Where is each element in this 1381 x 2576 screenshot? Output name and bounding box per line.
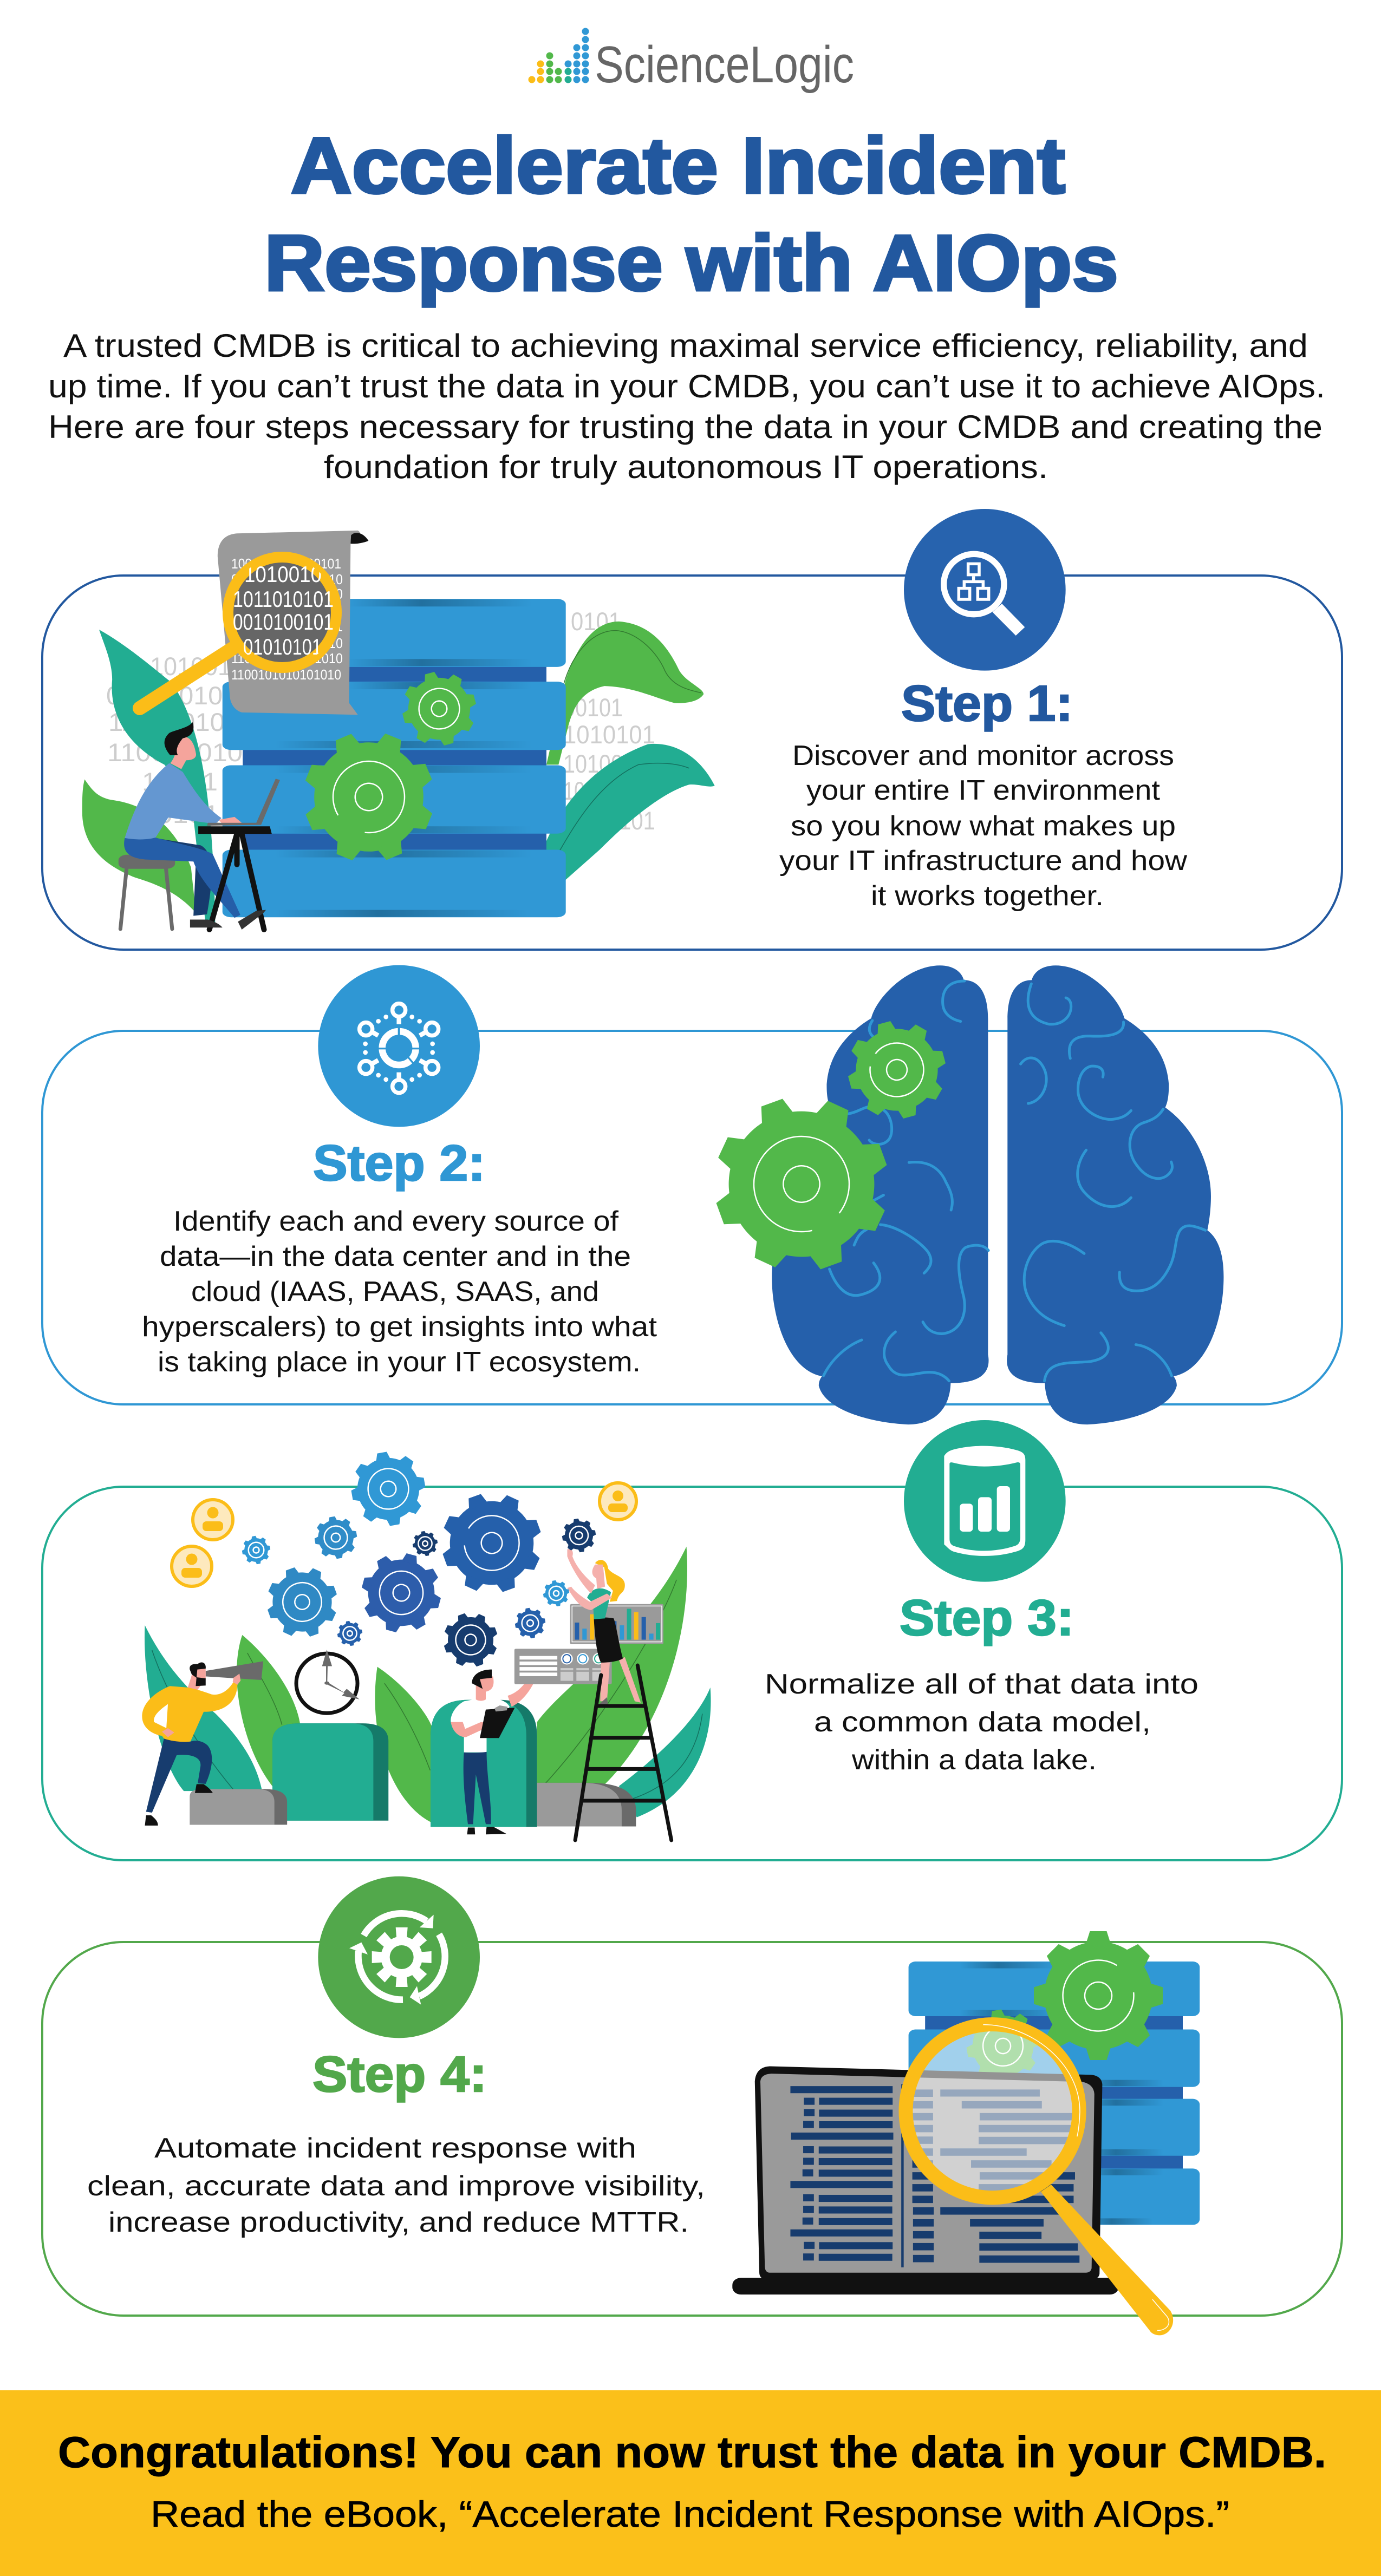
leaf: right teal: [546, 744, 715, 880]
background binary text: 101: [619, 806, 655, 835]
step 2 text: data—in the data center and in the: [160, 1241, 631, 1272]
server connectors: [925, 2015, 1183, 2170]
background binary text: 00101: [563, 693, 623, 722]
paper binary rows: [231, 555, 343, 683]
step 2 text: Identify each and every source of: [173, 1206, 619, 1237]
background binary text: 110010010: [107, 738, 243, 767]
background binary text: 01010010: [106, 681, 223, 710]
teal block: [272, 1723, 388, 1821]
title: [264, 121, 1118, 307]
step 3 heading: Step 3:: [900, 1590, 1074, 1646]
magnifier: [906, 2024, 1173, 2335]
step 2 heading: Step 2:: [313, 1135, 485, 1191]
gear: small behind lens: [961, 2004, 1045, 2088]
leaves: [145, 1547, 711, 1823]
server block 3: [223, 765, 566, 834]
stool: [119, 855, 175, 929]
laptop: [207, 779, 280, 826]
step 1 text: your IT infrastructure and how: [779, 845, 1187, 877]
step 4 text: Automate incident response with: [154, 2133, 636, 2164]
magnifier: 0010100101: [233, 609, 334, 635]
panel: step 4: [42, 1942, 1342, 2316]
illustration: step 3 team with gears: [142, 1446, 711, 1840]
laptop base: [732, 2278, 1118, 2294]
laptop screen: [760, 2074, 1095, 2273]
paper binary rows: 0010100101010101: [231, 618, 343, 635]
step 2 text: cloud (IAAS, PAAS, SAAS, and: [191, 1276, 599, 1307]
step 4 text: clean, accurate data and improve visibility,: [87, 2170, 705, 2202]
step 2 text: [142, 1206, 657, 1378]
title: Response with AIOps: [264, 219, 1118, 307]
gear: large: [691, 1073, 913, 1295]
logo: ScienceLogic: [529, 28, 854, 94]
brain left hemisphere: [772, 965, 989, 1424]
title: Accelerate Incident: [291, 121, 1065, 210]
cylinder with bars: [944, 1446, 1025, 1556]
bar chart panel: [570, 1604, 663, 1644]
brain folds: [824, 981, 1206, 1381]
gray block left: [190, 1789, 287, 1825]
step 4 heading: Step 4:: [312, 2046, 487, 2102]
near leg: [124, 838, 240, 918]
ladder: [575, 1665, 672, 1840]
background binary text: 10100: [563, 749, 623, 778]
leaf: right green: [546, 622, 703, 764]
intro paragraph: up time. If you can’t trust the data in your CMDB, you can’t use it to achieve AIOps.: [48, 368, 1325, 404]
step 1 icon: [904, 509, 1066, 671]
paper scroll: [218, 531, 360, 715]
server block 3: [909, 2099, 1200, 2156]
panel: step 1: [42, 576, 1342, 950]
gear with arrows: [349, 1913, 445, 2005]
magnifier: 01010101: [243, 634, 322, 659]
table top: [198, 826, 272, 834]
gear: large: [1034, 1931, 1163, 2060]
gear: small: [394, 664, 484, 754]
step 2 text: is taking place in your IT ecosystem.: [158, 1346, 641, 1378]
logo wordmark: ScienceLogic: [595, 36, 854, 94]
background binary text: 10101: [142, 767, 218, 796]
server block 4: [223, 850, 566, 917]
background binary text: 11010010: [108, 708, 225, 736]
server block 2: [223, 682, 566, 750]
step 1 text: [779, 740, 1187, 912]
step 4 icon: [318, 1877, 480, 2038]
paper binary rows: 0101010101010010: [231, 635, 343, 651]
woman reaching: [567, 1549, 642, 1707]
illustration: step 1 server stack, person and magnifier: [82, 531, 715, 930]
leaf: left green: [82, 779, 196, 913]
leaf: left teal: [99, 630, 215, 923]
hair: [165, 722, 193, 755]
magnifier: 1011010101: [233, 586, 334, 612]
shirt: [125, 763, 222, 839]
server block 4: [909, 2168, 1200, 2225]
intro paragraph: A trusted CMDB is critical to achieving maximal service efficiency, reliability, and: [63, 328, 1308, 364]
step 1 text: it works together.: [871, 880, 1104, 912]
head: [170, 737, 196, 769]
brain right hemisphere: [1007, 965, 1223, 1424]
banner link text: Read the eBook, “Accelerate Incident Response with AIOps.”: [151, 2494, 1229, 2535]
paper binary rows: 1011010101010100: [231, 586, 343, 602]
step 2 icon: [318, 965, 480, 1127]
paper binary rows: 1100101010101010: [231, 666, 341, 683]
panel: step 2: [42, 1031, 1342, 1404]
gear: large: [284, 712, 454, 882]
laptop lid: [755, 2067, 1102, 2279]
step 1 text: so you know what makes up: [791, 810, 1176, 842]
avatar 1: [193, 1500, 233, 1540]
banner: [0, 2390, 1381, 2576]
teal arch: [431, 1700, 537, 1827]
paper binary rows: 1001010100100101: [231, 555, 341, 572]
panel: step 3: [42, 1487, 1342, 1860]
magnifier with hierarchy: [944, 554, 1025, 636]
person at laptop: [119, 722, 280, 930]
background binary text: 101: [563, 776, 596, 805]
paper binary rows: 1100101010101010: [231, 650, 343, 666]
step 1 text: your entire IT environment: [806, 775, 1161, 806]
intro paragraph: foundation for truly autonomous IT operations.: [324, 449, 1048, 485]
server connectors: [243, 666, 546, 854]
screen code lines: [790, 2084, 1079, 2267]
step 1 text: Discover and monitor across: [792, 740, 1174, 772]
man with telescope: [142, 1661, 263, 1826]
step 1 heading: Step 1:: [901, 675, 1073, 731]
illustration: brain with gears: [691, 965, 1223, 1424]
background binary text: 1010101: [563, 720, 655, 749]
far leg: [155, 838, 212, 916]
tripod: [210, 834, 264, 930]
shoes: [190, 920, 223, 927]
server block 2: [909, 2030, 1200, 2087]
step 4 text: increase productivity, and reduce MTTR.: [108, 2207, 689, 2238]
background binary text: 0101: [571, 607, 621, 636]
avatar 2: [172, 1546, 212, 1586]
magnifier: [140, 557, 336, 708]
step 3 text: Normalize all of that data into: [765, 1669, 1198, 1700]
network ring with satellites: [360, 1004, 439, 1093]
step 3 text: within a data lake.: [851, 1744, 1097, 1776]
step 3 icon: [904, 1420, 1066, 1582]
background binary text: 101001: [150, 652, 231, 681]
server block 1: [909, 1962, 1200, 2016]
hand: [219, 817, 242, 824]
paper binary rows: 0101001010010010: [231, 571, 343, 587]
server block 1: [251, 599, 566, 667]
step 2 text: hyperscalers) to get insights into what: [142, 1311, 657, 1343]
gray block right: [537, 1783, 636, 1826]
background binary text: [106, 607, 655, 835]
banner headline: Congratulations! You can now trust the data in your CMDB.: [58, 2428, 1326, 2477]
intro paragraph: Here are four steps necessary for trusting the data in your CMDB and creating the: [48, 409, 1323, 445]
step 3 text: a common data model,: [814, 1707, 1151, 1738]
magnifier: 1010010: [244, 561, 322, 587]
dashboard panel: [514, 1649, 612, 1684]
step 4 text: [87, 2133, 705, 2238]
logo dots: [529, 28, 589, 83]
gear: small: [837, 1010, 956, 1129]
clock: [296, 1650, 360, 1713]
man with clipboard: [451, 1665, 539, 1834]
gears cluster: [240, 1446, 598, 1675]
intro paragraph: [48, 328, 1325, 485]
avatar 3: [600, 1483, 636, 1520]
background binary text: 0101: [157, 800, 219, 828]
illustration: laptop, servers and magnifier: [732, 1931, 1200, 2335]
step 3 text: [765, 1669, 1198, 1776]
